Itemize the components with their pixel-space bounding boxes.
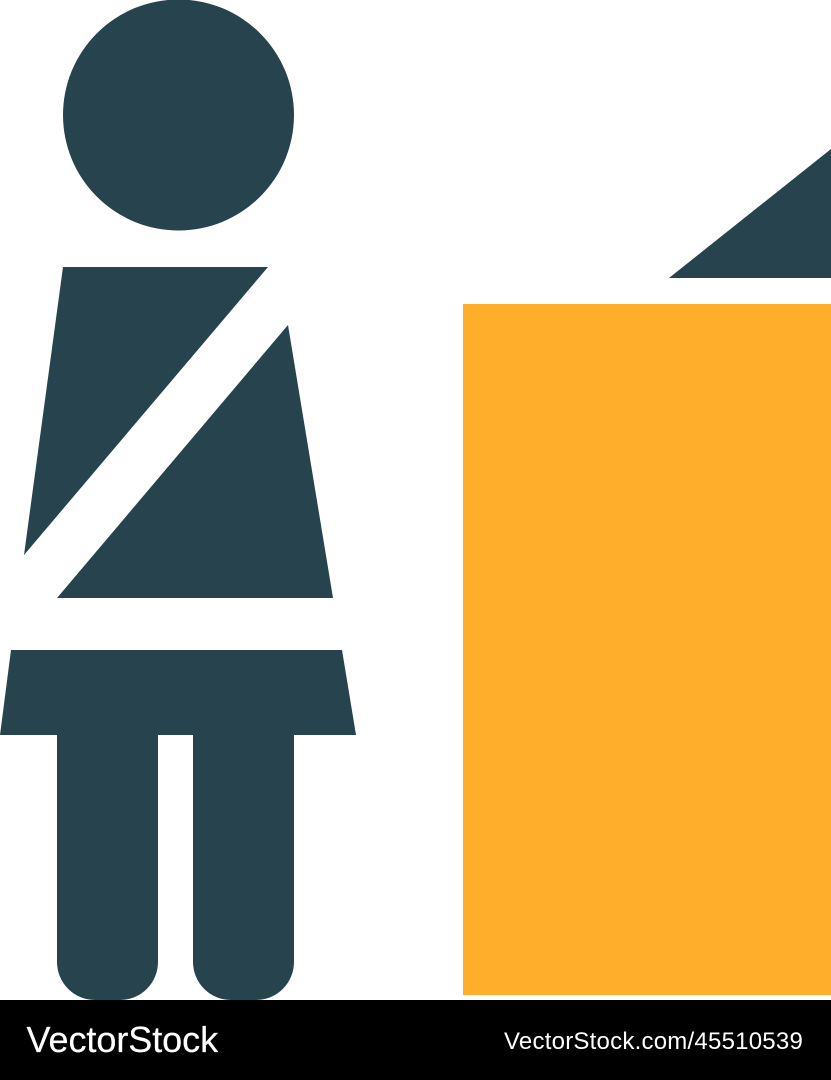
footer bar [0, 1000, 831, 1080]
icon: triangle on desk [669, 149, 831, 278]
person head [63, 0, 294, 230]
watermark logo: VectorStock [26, 1018, 218, 1060]
torso lower right with sash gap [57, 325, 333, 598]
right leg [193, 734, 294, 1000]
orange desk block [463, 304, 831, 995]
skirt [0, 650, 356, 735]
left leg [57, 734, 158, 1000]
image reference url: VectorStock.com/45510539 [504, 1028, 803, 1055]
torso upper left with sash gap [24, 267, 268, 555]
icon: person figure [0, 0, 356, 1000]
